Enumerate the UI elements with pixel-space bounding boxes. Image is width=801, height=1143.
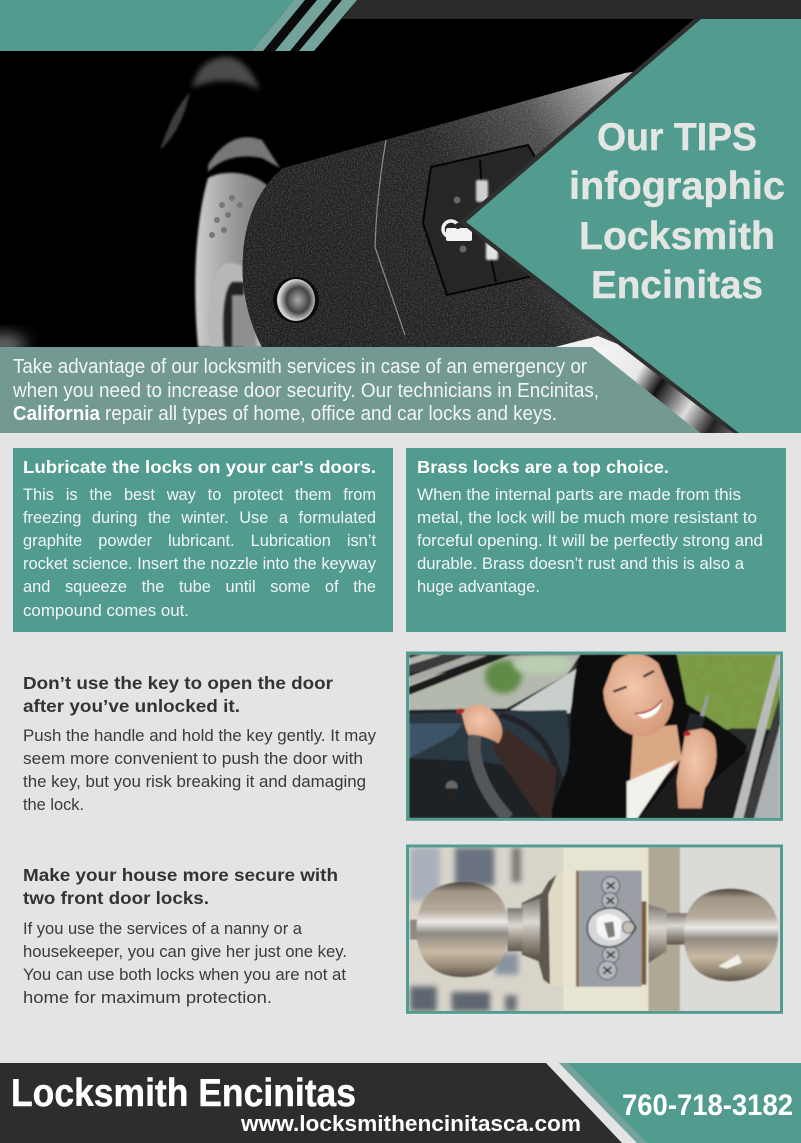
intro text: when you need to increase door security. Our technicians in Encinitas,	[12, 380, 599, 402]
text: lubricate body: compound comes out.	[23, 602, 189, 620]
text: don't use the key body: the key, but you risk breaking it and damaging	[23, 773, 366, 791]
photo: woman holding car key	[407, 646, 781, 819]
text: lubricate body	[23, 484, 376, 620]
text: don't use the key body: seem more convenient to push the door with	[23, 750, 363, 768]
title: Encinitas	[591, 264, 763, 307]
text: two front door locks body: housekeeper, you can give her just one key.	[23, 943, 347, 961]
text: brass body: forceful opening. It will be perfectly strong and	[417, 532, 763, 550]
panel: brass locks	[406, 448, 786, 632]
text: don't use the key body	[23, 727, 377, 814]
intro strip	[0, 347, 700, 433]
text: lubricate body: rocket science. Insert the nozzle into the keyway	[23, 555, 376, 573]
text: two front door locks body: You can use both locks when you are not at	[23, 966, 346, 984]
text: don't use the key body: Push the handle and hold the key gently. It may	[23, 727, 377, 745]
text: lubricate body: freezing during the winter. Use a formulated	[23, 509, 376, 527]
icon: lock on key fob	[443, 221, 472, 241]
heading: two front door locks: two front door locks.	[23, 888, 209, 908]
title: Locksmith	[579, 215, 775, 258]
title panel	[459, 19, 801, 433]
icon: key fob screw	[277, 279, 315, 321]
footer website: www.locksmithencinitasca.com	[240, 1111, 581, 1136]
heading: don't use the key: Don’t use the key to open the door	[23, 673, 333, 693]
text: brass body: huge advantage.	[417, 578, 540, 596]
intro text: Take advantage of our locksmith services in case of an emergency or	[13, 356, 587, 378]
text: don't use the key body: the lock.	[23, 796, 84, 814]
footer company name: Locksmith Encinitas	[11, 1072, 356, 1115]
footer	[0, 1063, 801, 1143]
heading: brass locks: Brass locks are a top choice.	[417, 457, 669, 477]
heading: don't use the key: after you’ve unlocked it.	[23, 696, 240, 716]
hero photo: car key fob	[0, 19, 694, 347]
title	[569, 116, 785, 307]
intro text: repair all types of home, office and car locks and keys.	[105, 403, 557, 425]
text: two front door locks body	[23, 920, 347, 1007]
title: infographic	[569, 165, 785, 208]
panel: lubricate the locks	[13, 448, 393, 632]
text: lubricate body: This is the best way to protect them from	[23, 486, 376, 504]
text: two front door locks body: home for maximum protection.	[23, 989, 272, 1007]
top banner	[0, 0, 801, 51]
heading: don't use the key	[23, 673, 333, 716]
title: Our TIPS	[597, 116, 757, 159]
intro text: California	[13, 403, 101, 425]
photo: door knobs and lock	[407, 846, 781, 1012]
text: lubricate body: graphite powder lubricant. Lubrication isn’t	[23, 532, 376, 550]
section: don't use the key	[23, 673, 377, 814]
section: two front door locks	[23, 865, 347, 1007]
text: two front door locks body: If you use the services of a nanny or a	[23, 920, 303, 938]
text: lubricate body: and squeeze the tube until some of the	[23, 578, 376, 596]
text: brass body: metal, the lock will be much more resistant to	[417, 509, 757, 527]
intro text	[12, 356, 599, 425]
heading: two front door locks	[23, 865, 338, 908]
text: brass body: When the internal parts are made from this	[417, 486, 741, 504]
heading: lubricate: Lubricate the locks on your car's doors.	[23, 457, 376, 477]
text: brass body	[417, 486, 763, 596]
heading: two front door locks: Make your house more secure with	[23, 865, 338, 885]
text: brass body: durable. Brass doesn’t rust and this is also a	[417, 555, 745, 573]
